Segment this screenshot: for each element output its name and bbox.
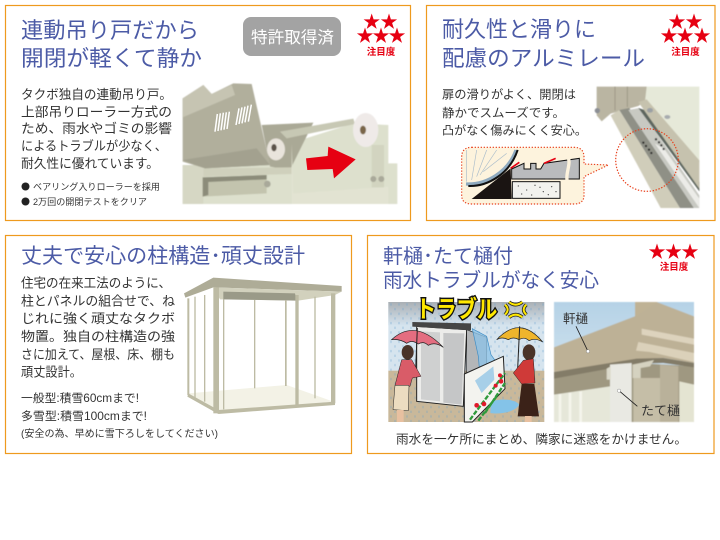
body text: linked door description: 上部吊りローラー方式の [21, 104, 172, 120]
snow load notes: 多雪型:積雪100cmまで! [21, 409, 147, 423]
photo: door rail [595, 87, 699, 208]
illustration: person with yellow umbrella [497, 326, 543, 422]
body text: linked door description: によるトラブルが少なく、 [21, 138, 167, 154]
panel: pillar structure [6, 236, 352, 454]
illustration: trouble lettering: トラブル [416, 295, 497, 323]
heading: aluminium rail: 耐久性と滑りに [442, 17, 596, 42]
heading: gutters: 軒樋･たて樋付 [383, 245, 513, 268]
body text: pillar description: じれに強く頑丈なタクボ [21, 311, 175, 326]
heading: aluminium rail [442, 17, 645, 71]
photo: door roller mechanism [183, 83, 397, 204]
patent badge [243, 17, 341, 56]
icon: five-star attention rating: 注目度 [367, 46, 396, 58]
body text: pillar description: 柱とパネルの組合せで、ね [21, 294, 175, 308]
body text: rail description: 扉の滑りがよく、開閉は [442, 86, 576, 102]
body text: pillar description [21, 276, 175, 380]
icon: five-star attention rating [661, 14, 710, 58]
snow load notes: (安全の為、早めに雪下ろしをしてください) [21, 427, 218, 440]
illustration: rain trouble without gutter [388, 295, 544, 422]
body text: pillar description: 住宅の在来工法のように、 [21, 276, 171, 290]
label: downpipe: たて樋 [641, 404, 681, 418]
bullet list: ベアリング入りローラーを採用 [33, 181, 160, 192]
panel: aluminium rail [426, 6, 715, 220]
body text: linked door description: タクボ独自の連動吊り戸。 [21, 87, 172, 102]
panel: linked sliding door [6, 6, 410, 220]
icon: five-star attention rating: 注目度 [671, 46, 700, 58]
heading: aluminium rail: 配慮のアルミレール [442, 46, 645, 71]
snow load notes [21, 391, 218, 440]
body text: rail description: 静かでスムーズです。 [442, 105, 565, 120]
heading: gutters: 雨水トラブルがなく安心 [383, 268, 599, 292]
body text: linked door description: 耐久性に優れています。 [21, 156, 159, 171]
heading: gutters [383, 245, 599, 292]
heading: linked sliding door [21, 18, 202, 71]
panel: gutters [368, 236, 714, 454]
photo: eaves gutter and downpipe [554, 302, 694, 422]
icon: three-star attention rating: 注目度 [660, 261, 689, 273]
heading: linked sliding door: 開閉が軽くて静か [21, 46, 202, 71]
body text: pillar description: 頑丈設計。 [21, 364, 82, 380]
heading: linked sliding door: 連動吊り戸だから [21, 18, 199, 43]
snow load notes: 一般型:積雪60cmまで! [21, 391, 139, 405]
patent badge: 特許取得済 [251, 28, 334, 47]
callout: enlargement circle [616, 129, 678, 191]
callout: rail cross-section bubble [462, 147, 608, 204]
body text: linked door description: ため、雨水やゴミの影響 [21, 121, 172, 136]
label: eaves gutter: 軒樋 [563, 312, 588, 326]
caption: 雨水を一ケ所にまとめ、隣家に迷惑をかけません。 [396, 432, 687, 446]
body text: rail description: 凸がなく傷みにくく安心。 [442, 122, 587, 138]
heading: pillar structure: 丈夫で安心の柱構造･頑丈設計 [21, 245, 305, 268]
icon: five-star attention rating [357, 14, 405, 58]
bullet list: 2万回の開閉テストをクリア [33, 197, 147, 207]
body text: rail description [442, 86, 587, 138]
icon: three-star attention rating [649, 244, 698, 273]
bullet list [22, 181, 160, 207]
photo: glass-walled shed [184, 278, 342, 414]
body text: linked door description [21, 87, 172, 171]
body text: pillar description: さに加えて、屋根、床、棚も [21, 347, 175, 362]
illustration: person with pink umbrella [392, 328, 443, 422]
body text: pillar description: 物置。独自の柱構造の強 [21, 329, 175, 344]
